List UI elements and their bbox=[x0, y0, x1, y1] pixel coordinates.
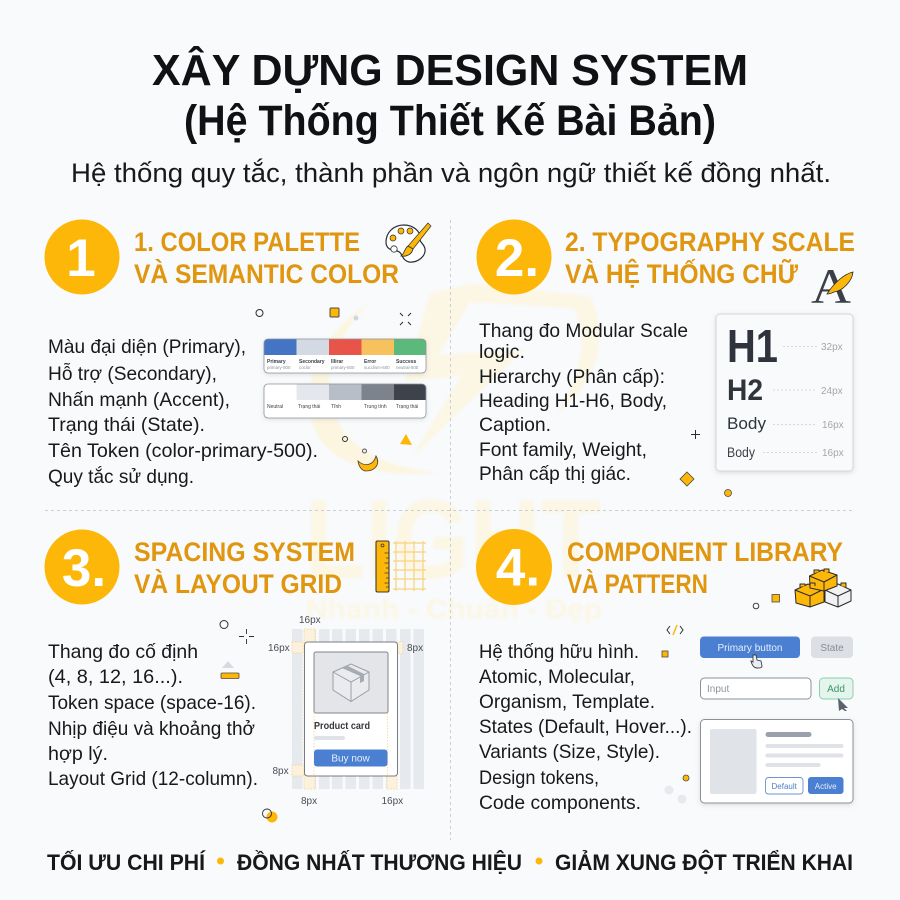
type scale card: 24px bbox=[821, 386, 843, 397]
neutral swatch card: Trung tính bbox=[364, 404, 387, 410]
color swatch card bbox=[264, 339, 426, 373]
product card: Buy now bbox=[331, 754, 370, 764]
footer benefits: TỐI ƯU CHI PHÍ bbox=[47, 849, 206, 875]
body text 2: Thang đo Modular Scale bbox=[479, 320, 688, 342]
body text 3: hợp lý. bbox=[48, 743, 108, 765]
color swatch card: Primary bbox=[267, 359, 286, 365]
footer benefits bbox=[47, 849, 853, 875]
title: (Hệ Thống Thiết Kế Bài Bản) bbox=[184, 98, 716, 145]
icon: building blocks bbox=[795, 569, 851, 607]
layout grid diagram bbox=[268, 615, 424, 807]
type scale card: H2 bbox=[727, 374, 763, 407]
product card bbox=[304, 642, 398, 776]
decorative icons 2 bbox=[680, 430, 732, 496]
color swatch card: Illirar bbox=[331, 359, 343, 365]
body text 4 bbox=[479, 641, 692, 814]
body text 4: Code components. bbox=[479, 792, 641, 814]
heading 4: VÀ PATTERN bbox=[567, 569, 708, 599]
heading 2 bbox=[565, 227, 855, 289]
icon: box bbox=[333, 664, 369, 702]
default button: Default bbox=[772, 782, 798, 791]
number badge 2 bbox=[476, 220, 552, 294]
spacing labels: 8px bbox=[272, 766, 289, 777]
color swatch card: Error bbox=[364, 359, 376, 365]
heading 4: COMPONENT LIBRARY bbox=[567, 537, 843, 567]
input field: Input bbox=[707, 684, 729, 695]
heading 2: VÀ HỆ THỐNG CHỮ bbox=[565, 259, 798, 289]
body text 3: Thang đo cố định bbox=[48, 641, 198, 663]
body text 4: Design tokens, bbox=[479, 767, 599, 789]
decorative icons 1 bbox=[256, 308, 412, 471]
body text 1: Nhấn mạnh (Accent), bbox=[48, 389, 230, 411]
body text 3: (4, 8, 12, 16...). bbox=[48, 666, 183, 688]
input field bbox=[700, 678, 811, 699]
primary button: Primary button bbox=[718, 643, 782, 654]
neutral swatch card: Tĩnh bbox=[331, 404, 341, 410]
number badge 3: 3. bbox=[62, 539, 106, 598]
icon: arrow cursor bbox=[838, 698, 848, 711]
title: XÂY DỰNG DESIGN SYSTEM bbox=[152, 45, 748, 95]
body text 1: Trạng thái (State). bbox=[48, 414, 205, 436]
body text 3: Token space (space-16). bbox=[48, 692, 256, 714]
color swatch card: Success bbox=[396, 359, 417, 365]
component card bbox=[700, 720, 853, 803]
spacing labels: 16px bbox=[268, 643, 290, 654]
body text 3 bbox=[48, 641, 258, 790]
footer benefits: GIẢM XUNG ĐỘT TRIỂN KHAI bbox=[555, 850, 853, 875]
icon: hand cursor bbox=[751, 655, 762, 668]
heading 3: SPACING SYSTEM bbox=[134, 537, 355, 567]
heading 1: 1. COLOR PALETTE bbox=[134, 227, 360, 257]
add button bbox=[820, 678, 853, 699]
body text 2 bbox=[479, 320, 688, 485]
add button: Add bbox=[827, 684, 845, 695]
body text 2: Hierarchy (Phân cấp): bbox=[479, 366, 665, 388]
body text 3: Nhịp điệu và khoảng thở bbox=[48, 718, 255, 740]
type scale card bbox=[716, 314, 853, 471]
type scale card: Body bbox=[727, 415, 767, 433]
spacing labels: 16px bbox=[382, 796, 403, 807]
neutral swatch card: Neutral bbox=[267, 404, 283, 410]
number badge 1: 1 bbox=[66, 229, 96, 288]
active button: Active bbox=[815, 782, 837, 791]
number badge 2: 2. bbox=[495, 229, 539, 288]
heading 2: 2. TYPOGRAPHY SCALE bbox=[565, 227, 855, 257]
decorative icons 3 bbox=[220, 620, 278, 822]
spacing labels bbox=[268, 615, 423, 807]
heading 3: VÀ LAYOUT GRID bbox=[134, 569, 342, 599]
spacing labels: 8px bbox=[301, 796, 317, 807]
title bbox=[152, 45, 748, 145]
body text 4: States (Default, Hover...). bbox=[479, 716, 692, 738]
body text 4: Hệ thống hữu hình. bbox=[479, 641, 639, 663]
product card: Product card bbox=[314, 721, 370, 732]
body text 1: Quy tắc sử dụng. bbox=[48, 465, 194, 488]
number badge 3 bbox=[44, 530, 120, 604]
decorative icons 4 bbox=[662, 594, 780, 804]
number badge 4: 4. bbox=[496, 538, 540, 598]
icon: letter A with feather: A bbox=[811, 258, 851, 314]
color swatch card: primary-500 bbox=[331, 365, 355, 370]
state button bbox=[811, 636, 853, 658]
state button: State bbox=[820, 643, 844, 654]
spacing labels: 16px bbox=[299, 615, 321, 626]
body text 4: Organism, Template. bbox=[479, 691, 655, 713]
heading 1 bbox=[134, 227, 399, 289]
body text 1: Màu đại diện (Primary), bbox=[48, 336, 246, 358]
heading 4 bbox=[567, 537, 843, 599]
grid columns bbox=[292, 629, 424, 789]
color swatch card: neutral-500 bbox=[396, 365, 419, 370]
subtitle: Hệ thống quy tắc, thành phần và ngôn ngữ thiết kế đồng nhất. bbox=[71, 157, 831, 188]
heading 1: VÀ SEMANTIC COLOR bbox=[134, 259, 399, 289]
watermark logo: Nhanh - Chuẩn - Đẹp bbox=[306, 594, 602, 624]
spacing labels: 8px bbox=[407, 643, 423, 654]
panel: typography scale bbox=[476, 220, 855, 496]
icon: palette and brush bbox=[386, 223, 431, 262]
panel: color palette bbox=[44, 220, 431, 488]
panel: spacing system bbox=[44, 530, 426, 822]
body text 1: Tên Token (color-primary-500). bbox=[48, 440, 318, 462]
number badge 1 bbox=[44, 220, 120, 294]
body text 2: Font family, Weight, bbox=[479, 439, 647, 461]
body text 1 bbox=[48, 336, 318, 488]
number badge 4 bbox=[476, 529, 552, 605]
watermark logo bbox=[305, 284, 602, 624]
color swatch card: coclor bbox=[299, 365, 311, 370]
neutral swatch card: Trạng thái bbox=[298, 404, 320, 410]
color swatch card: succlism-500 bbox=[364, 365, 390, 370]
watermark logo: LIGHT bbox=[305, 477, 601, 602]
body text 4: Variants (Size, Style). bbox=[479, 741, 660, 763]
type scale card: 16px bbox=[822, 448, 844, 459]
type scale card: H1 bbox=[727, 320, 778, 372]
color swatch card: Secondary bbox=[299, 359, 325, 365]
body text 2: logic. bbox=[479, 341, 525, 363]
primary button bbox=[700, 636, 800, 658]
heading 3 bbox=[134, 537, 355, 599]
body text 2: Caption. bbox=[479, 414, 551, 436]
type scale card: Body bbox=[727, 445, 755, 460]
icon: ruler and grid bbox=[376, 541, 426, 592]
neutral swatch card bbox=[264, 384, 426, 418]
body text 2: Heading H1-H6, Body, bbox=[479, 390, 667, 412]
default button bbox=[766, 778, 803, 794]
body text 2: Phân cấp thị giác. bbox=[479, 463, 631, 485]
type scale card: 16px bbox=[822, 420, 844, 431]
panel: component library bbox=[476, 529, 853, 814]
spacing highlights bbox=[292, 629, 403, 789]
footer benefits: ĐỒNG NHẤT THƯƠNG HIỆU bbox=[237, 850, 522, 875]
body text 1: Hỗ trợ (Secondary), bbox=[48, 362, 217, 385]
type scale card: 32px bbox=[821, 342, 843, 353]
color swatch card: primary-500 bbox=[267, 365, 291, 370]
active button bbox=[808, 777, 844, 794]
neutral swatch card: Trạng thái bbox=[396, 404, 418, 410]
body text 3: Layout Grid (12-column). bbox=[48, 768, 258, 790]
body text 4: Atomic, Molecular, bbox=[479, 666, 635, 688]
